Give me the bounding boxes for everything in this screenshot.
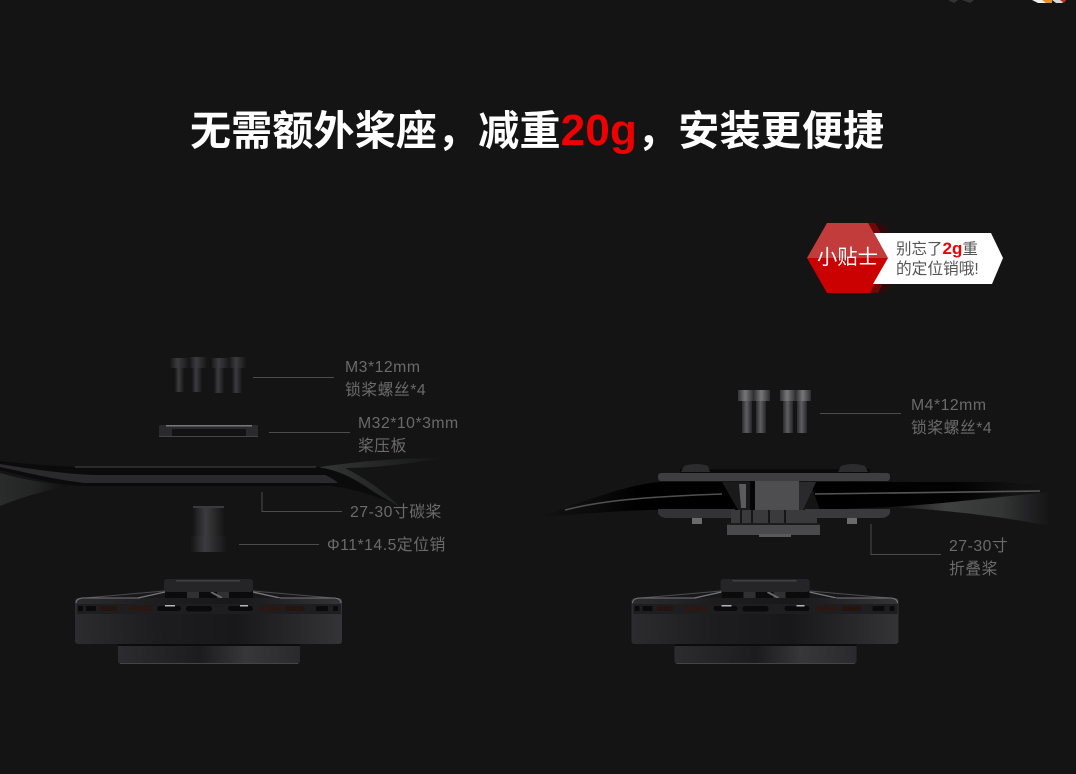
icon: carbon propeller blade (0, 458, 445, 507)
icon: four M4 screws (738, 390, 811, 433)
icon: prop clamp plate (159, 425, 258, 437)
label: clamp plate (358, 415, 459, 455)
callout: tip badge: 的定位销哦! (896, 260, 979, 278)
icon: locating pin (191, 506, 226, 552)
callout: tip badge: 小贴士 (817, 246, 878, 269)
label: clamp plate: 桨压板 (358, 437, 407, 455)
label: folding prop (949, 537, 1008, 578)
left assembly: carbon prop exploded view (0, 357, 445, 664)
label: M4 screws: M4*12mm (911, 397, 986, 414)
callout: tip badge: 别忘了2g重 (896, 239, 978, 258)
label: folding prop: 折叠桨 (949, 560, 998, 578)
label: carbon prop: 27-30寸碳桨 (350, 503, 442, 521)
label lines right (820, 414, 941, 554)
icon: motor right (632, 579, 898, 664)
label: M3 screws: 锁桨螺丝*4 (345, 381, 426, 399)
label: M3 screws (345, 359, 426, 399)
label: M3 screws: M3*12mm (345, 359, 420, 376)
label: M4 screws: 锁桨螺丝*4 (911, 419, 992, 437)
label: M4 screws (911, 397, 992, 437)
top edge fragment (948, 0, 1066, 3)
icon: motor left (75, 579, 342, 664)
icon: four M3 screws (170, 357, 246, 393)
title: 无需额外桨座，减重20g，安装更便捷 (190, 106, 884, 155)
label: folding prop: 27-30寸 (949, 537, 1008, 555)
label: clamp plate: M32*10*3mm (358, 415, 459, 432)
label: locating pin: Φ11*14.5定位销 (327, 536, 446, 554)
right assembly: folding prop (538, 390, 1052, 664)
label lines left (239, 378, 350, 544)
callout: tip badge (807, 223, 1003, 293)
icon: folding prop blades and hub (538, 464, 1052, 537)
